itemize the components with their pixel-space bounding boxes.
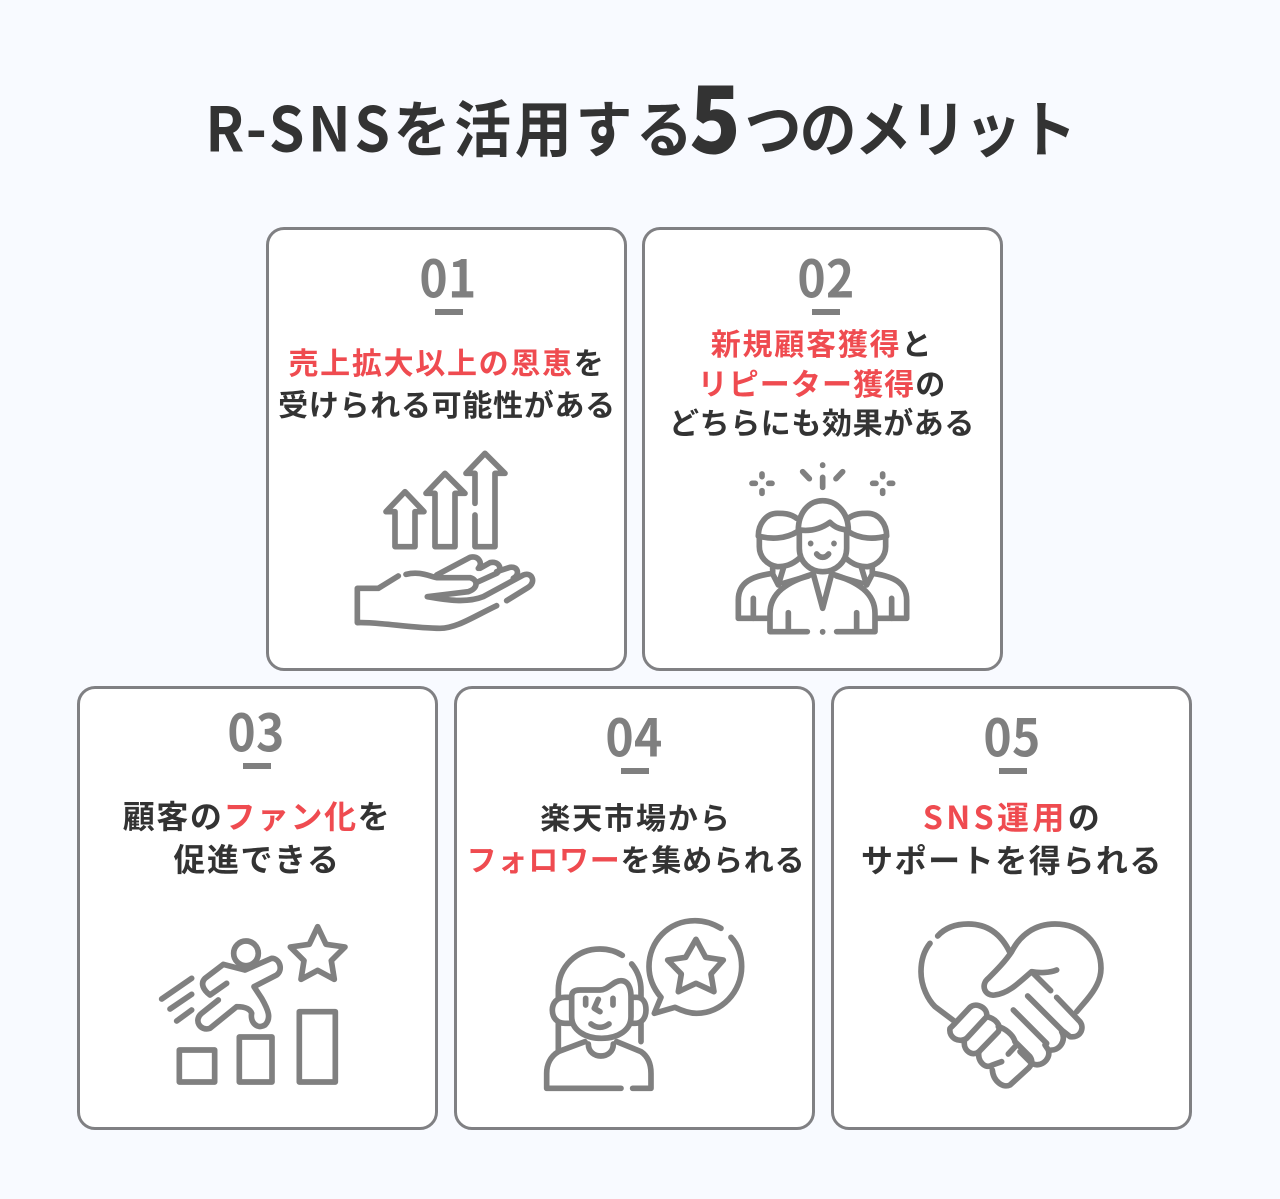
number 04: 04 (605, 696, 663, 772)
text: merit 03 (123, 792, 391, 881)
text: merit 05: SNS運用の (923, 792, 1103, 838)
number dash (620, 768, 648, 774)
number dash (812, 309, 840, 315)
number 03: 03 (227, 691, 285, 767)
text: merit 02: どちらにも効果がある (669, 399, 975, 443)
number dash (242, 763, 270, 769)
number 01: 01 (419, 237, 477, 313)
icon: handshake heart (921, 924, 1101, 1086)
panel: merit 01 (266, 227, 626, 670)
text: merit 02: 新規顧客獲得と (711, 320, 933, 364)
text: merit 03: 顧客のファン化を (123, 792, 391, 838)
text: merit 05: サポートを得られる (861, 836, 1163, 882)
panel: merit 03 (76, 686, 438, 1130)
text: merit 03: 促進できる (173, 835, 341, 881)
panel: merit 04 (454, 686, 814, 1130)
text: merit 01 (278, 338, 616, 424)
text: merit 01: 受けられる可能性がある (278, 380, 616, 424)
icon: hand with rising arrows (357, 453, 533, 628)
icon: runner climbing bars to star (162, 927, 345, 1082)
text: merit 02 (669, 320, 975, 443)
text: merit 04: フォロワーを集められる (467, 836, 805, 880)
panel: merit 05 (830, 686, 1192, 1130)
number 05: 05 (983, 696, 1041, 772)
icon: woman with star speech bubble (547, 921, 742, 1088)
icon: group of people (738, 465, 907, 632)
number 02: 02 (797, 237, 855, 313)
text: merit 02: リピーター獲得の (698, 360, 946, 404)
title: R-SNSを活用する5つのメリット (205, 49, 1075, 180)
text: merit 01: 売上拡大以上の恩恵を (288, 338, 606, 382)
number dash (998, 768, 1026, 774)
text: merit 04 (467, 794, 805, 880)
number dash (434, 309, 462, 315)
panel: merit 02 (642, 227, 1002, 670)
text: merit 04: 楽天市場から (540, 794, 732, 838)
text: merit 05 (861, 792, 1163, 882)
